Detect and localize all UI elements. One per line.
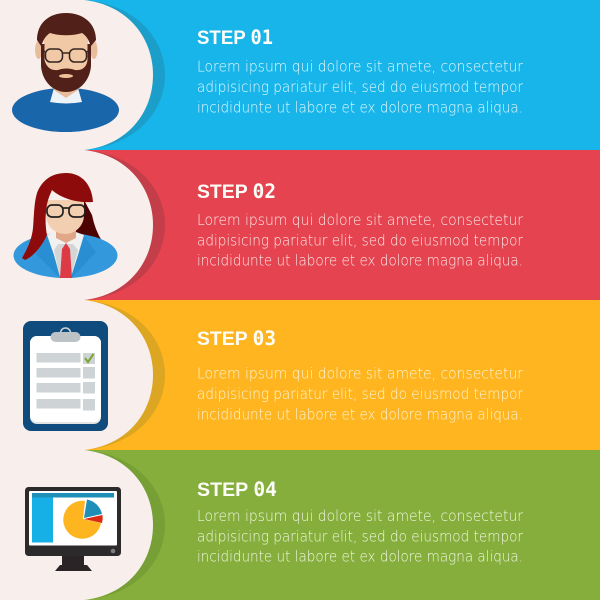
text block: step 03: [197, 364, 524, 424]
text block: step 02: [197, 211, 524, 270]
text block: step 01: [197, 58, 524, 116]
text block: step 04: adipisicing pariatur elit, sed do eiusmod tempor: [197, 528, 524, 546]
icon: woman with red hair: [14, 173, 118, 278]
text block: step 02: adipisicing pariatur elit, sed do eiusmod tempor: [197, 232, 524, 250]
text block: step 02: Lorem ipsum qui dolore sit amete, consectetur: [197, 211, 524, 229]
panel: step 2 band: [0, 150, 600, 300]
text block: step 04: incididunte ut labore et ex dolore magna aliqua.: [197, 548, 523, 566]
panel: step 4 band: [0, 450, 600, 600]
heading: step 03: STEP 03: [197, 327, 276, 350]
panel: step 1 band: [0, 0, 600, 150]
text block: step 03: Lorem ipsum qui dolore sit amete, consectetur: [197, 364, 524, 382]
text block: step 04: [197, 507, 524, 566]
icon: clipboard checklist: [23, 321, 108, 431]
heading: step 04: STEP 04: [197, 478, 277, 501]
text block: step 04: Lorem ipsum qui dolore sit amete, consectetur: [197, 507, 524, 525]
text block: step 02: incididunte ut labore et ex dolore magna aliqua.: [197, 252, 523, 270]
icon: computer monitor with pie chart: [25, 487, 121, 571]
text block: step 03: adipisicing pariatur elit, sed do eiusmod tempor: [197, 385, 524, 403]
icon: bearded man: [12, 13, 119, 132]
panel: step 3 band: [0, 300, 600, 450]
text block: step 01: incididunte ut labore et ex dolore magna aliqua.: [197, 98, 523, 116]
text block: step 01: adipisicing pariatur elit, sed do eiusmod tempor: [197, 78, 524, 96]
heading: step 01: STEP 01: [197, 26, 273, 49]
text block: step 01: Lorem ipsum qui dolore sit amete, consectetur: [197, 58, 524, 76]
heading: step 02: STEP 02: [197, 180, 276, 203]
text block: step 03: incididunte ut labore et ex dolore magna aliqua.: [197, 406, 523, 424]
